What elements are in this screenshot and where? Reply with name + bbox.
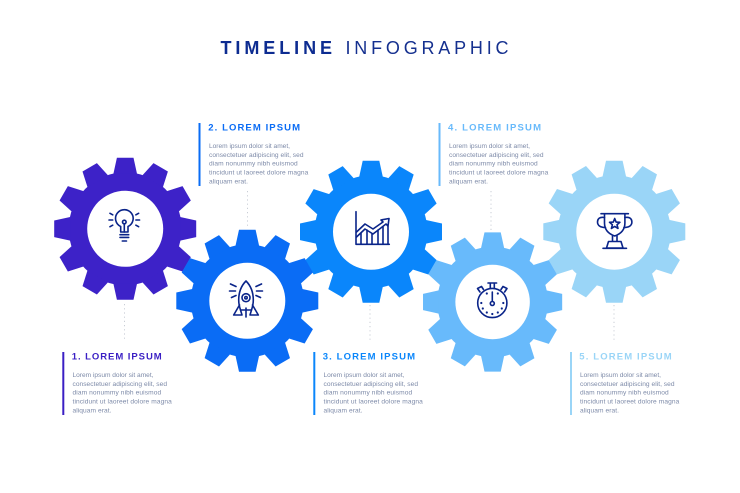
body 4: diam nonummy nibh euismod: [449, 161, 538, 168]
heading 4: 4. LOREM IPSUM: [448, 122, 541, 134]
body 2: consectetuer adipiscing elit, sed: [209, 152, 304, 159]
body 3: diam nonummy nibh euismod: [324, 390, 413, 397]
heading 1: 1. LOREM IPSUM: [72, 352, 162, 362]
body 5: aliquam erat.: [580, 407, 619, 414]
text block 2: [198, 122, 309, 186]
body 1: diam nonummy nibh euismod: [72, 390, 162, 397]
title: TIMELINE: [220, 38, 332, 58]
connector: gear 3 to text: [369, 305, 371, 340]
body 1: tincidunt ut laoreet dolore magna: [72, 398, 172, 405]
body 4: Lorem ipsum dolor sit amet,: [449, 143, 530, 150]
accent bar 2: [198, 123, 200, 186]
accent bar 3: [313, 352, 315, 415]
heading 5: 5. LOREM IPSUM: [579, 352, 672, 362]
connector: gear 1 to text: [124, 304, 126, 340]
body 4: tincidunt ut laoreet dolore magna: [449, 169, 549, 176]
connector: gear 2 to text: [246, 191, 248, 228]
gear 5: [543, 161, 685, 303]
icon: stopwatch: [478, 283, 507, 318]
body 2: Lorem ipsum dolor sit amet,: [209, 143, 290, 150]
body 4: [449, 143, 549, 185]
body 4: consectetuer adipiscing elit, sed: [449, 152, 544, 159]
accent bar 5: [570, 352, 572, 415]
body 1: [72, 372, 172, 414]
body 1: Lorem ipsum dolor sit amet,: [72, 372, 154, 379]
body 4: aliquam erat.: [449, 178, 488, 185]
gear 4: [423, 232, 562, 372]
body 5: diam nonummy nibh euismod: [580, 390, 669, 397]
body 2: diam nonummy nibh euismod: [209, 161, 298, 168]
heading 2: 2. LOREM IPSUM: [208, 122, 300, 134]
gear 1: [54, 158, 196, 300]
body 5: [580, 372, 680, 414]
text block 3: [313, 352, 423, 415]
body 3: tincidunt ut laoreet dolore magna: [324, 398, 423, 405]
body 3: Lorem ipsum dolor sit amet,: [324, 372, 405, 379]
text block 1: [62, 352, 172, 415]
accent bar 1: [62, 352, 64, 415]
heading 3: 3. LOREM IPSUM: [323, 352, 415, 362]
icon: trophy: [598, 214, 632, 248]
body 1: aliquam erat.: [72, 407, 112, 414]
body 2: [209, 143, 309, 185]
gear 2: [176, 230, 318, 372]
body 3: aliquam erat.: [324, 407, 363, 414]
body 3: [324, 372, 423, 414]
body 5: Lorem ipsum dolor sit amet,: [580, 372, 661, 379]
body 5: tincidunt ut laoreet dolore magna: [580, 398, 680, 405]
body 2: aliquam erat.: [209, 178, 248, 185]
icon: growth chart: [356, 212, 389, 244]
body 2: tincidunt ut laoreet dolore magna: [209, 169, 309, 176]
text block 5: [570, 352, 680, 415]
body 3: consectetuer adipiscing elit, sed: [324, 381, 418, 388]
title: INFOGRAPHIC: [346, 38, 508, 58]
gear 3: [300, 161, 442, 303]
body 5: consectetuer adipiscing elit, sed: [580, 381, 675, 388]
connector: gear 5 to text: [613, 305, 615, 340]
text block 4: [438, 122, 549, 186]
title: [220, 38, 508, 58]
icon: rocket: [230, 281, 262, 317]
icon: light bulb: [109, 210, 140, 241]
body 1: consectetuer adipiscing elit, sed: [72, 381, 167, 388]
connector: gear 4 to text: [490, 191, 492, 231]
accent bar 4: [438, 123, 440, 186]
